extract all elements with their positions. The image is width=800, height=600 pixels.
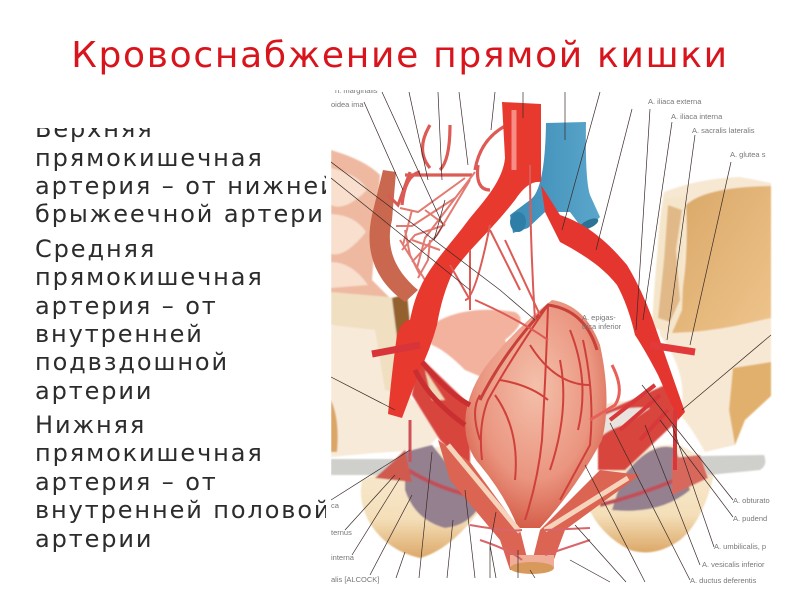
anatomical labels: A. vesicalis inferior <box>702 560 765 569</box>
anatomical labels: A. obturato <box>733 496 770 505</box>
anatomical labels: A. glutea s <box>730 150 766 159</box>
text: superior rectal artery: прямокишечная <box>35 144 264 172</box>
anatomical labels: interna <box>331 553 355 562</box>
anal canal <box>438 440 640 574</box>
anatomical labels: oidea ima <box>331 100 364 109</box>
leader lines <box>331 92 771 582</box>
vein: inferior vena cava <box>510 122 600 233</box>
anatomical labels <box>331 86 770 585</box>
bone: right ilium <box>590 177 771 452</box>
text block: arteries list <box>35 128 326 553</box>
text: middle rectal artery: внутренней <box>35 320 204 348</box>
anatomical labels: trica inferior <box>582 322 622 331</box>
text: middle rectal artery: артерия – от <box>35 292 218 320</box>
text: middle rectal artery: подвздошной <box>35 348 229 376</box>
anatomical labels: ca <box>331 501 340 510</box>
anatomical labels: alis [ALCOCK] <box>331 575 379 584</box>
text: inferior rectal artery: артерии <box>35 525 153 553</box>
bladder / sigmoid loop <box>430 310 521 385</box>
text: middle rectal artery: артерии <box>35 377 153 405</box>
pelvic floor left <box>331 445 482 558</box>
rectum <box>465 300 607 528</box>
anatomical labels: A. iliaca interna <box>671 112 723 121</box>
anatomical labels: A. iliaca externa <box>648 97 702 106</box>
colon wall and mesentery <box>369 125 505 302</box>
text: middle rectal artery <box>35 235 264 405</box>
anatomical labels: A. umbilicalis, p <box>714 542 766 551</box>
text: inferior rectal artery: Нижняя <box>35 411 146 439</box>
text: middle rectal artery: прямокишечная <box>35 263 264 291</box>
text: middle rectal artery: Средняя <box>35 235 156 263</box>
red pelvic muscle masses <box>412 355 678 470</box>
text: inferior rectal artery <box>35 411 326 553</box>
anatomical labels: A. ductus deferentis <box>690 576 757 585</box>
anatomical labels: A. pudend <box>733 514 767 523</box>
anatomical illustration <box>331 90 772 585</box>
text: superior rectal artery <box>35 128 326 228</box>
anatomical labels: ternus <box>331 528 352 537</box>
text: inferior rectal artery: прямокишечная <box>35 439 264 467</box>
pelvic floor right <box>587 445 765 552</box>
anatomical labels: A. sacralis lateralis <box>692 126 755 135</box>
text: inferior rectal artery: артерия – от <box>35 468 218 496</box>
text: inferior rectal artery: внутренней половой <box>35 496 326 524</box>
title: Кровоснабжение прямой кишки <box>71 35 729 76</box>
anatomical labels: A. epigas- <box>582 313 616 322</box>
white backing <box>327 90 771 586</box>
artery: aorta and iliac arteries <box>372 102 695 470</box>
bone: left ilium with colon <box>331 150 445 457</box>
